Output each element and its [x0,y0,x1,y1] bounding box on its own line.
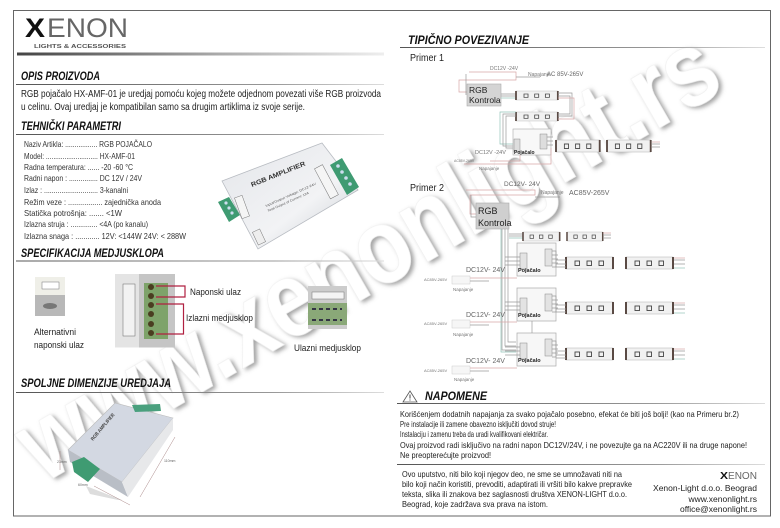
heading: Napomene: NAPOMENE [425,391,487,403]
photo: device dimensions: 23mm [57,460,67,464]
contact details: www.xenonlight.rs [687,494,757,504]
heading: Specifikacija medjusklopa: SPECIFIKACIJA MEDJUSKLOPA [21,246,164,260]
photo: device dimensions [57,403,175,505]
logo: Xenon Lights & Accessories [25,13,128,50]
product photo: RGB amplifier [218,143,359,249]
amplifier 3: Pojačalo [518,358,541,364]
product photo: RGB amplifier: Total Output of Current: 12A [267,191,310,213]
logo: Xenon Lights & Accessories: X [25,13,45,43]
wiring diagram: Primer 1: AC85V-265V [454,159,475,163]
technical parameters list: Režim veze : ................. zajednička anoda [24,198,161,207]
text block: copyright notice: Ovo uputstvo, niti bilo koji njegov deo, ne sme se umnožavati niti na [402,469,622,479]
logo: Xenon Lights & Accessories: ENON [47,13,128,43]
wiring diagram: Primer 2: Napajanje [541,190,564,196]
wiring diagram: Primer 2: DC12V- 24V [466,312,505,319]
wiring diagram: Primer 2: Napajanje [453,287,474,292]
box: RGB Kontrola: RGB [469,85,488,95]
logo: Xenon Lights & Accessories: LIGHTS & ACCESSORIES [34,44,126,50]
technical parameters list: Model: ............................ HX-AMF-01 [24,152,135,161]
amplifier 1: Pojačalo [518,268,541,274]
wiring diagram: Primer 1: Napajanje [528,72,551,78]
text block: description [21,89,381,113]
wiring diagram: Primer 1: Pojačalo [514,150,535,156]
technical parameters list: Izlazna snaga : ............ 12V: <144W 24V: < 288W [24,232,186,241]
wiring diagram: Primer 2: AC85V-265V [569,190,610,197]
text block: copyright notice [402,469,632,509]
box: RGB Kontrola: RGB [478,206,498,216]
technical parameters list: Radna temperatura: ...... -20 -60 °C [24,163,133,172]
icon: warning triangle [403,391,417,402]
photo: alternative power input [35,277,65,316]
label: Primer 2: Primer 2 [410,183,444,194]
wiring diagram: Primer 1 [454,66,660,171]
logo: small Xenon: X [720,471,728,482]
wiring diagram: Primer 2: AC85V-265V [424,368,447,373]
text block: description: RGB pojačalo HX-AMF-01 je uredjaj pomoću kojeg možete odjednom povezati više RGB proizvoda [21,89,381,100]
technical parameters list: Izlazna struja : .............. <4A (po kanalu) [24,220,148,229]
technical parameters list: Naziv Artikla: ................. RGB POJAČALO [24,139,152,149]
wiring diagram: Primer 2: AC85V-265V [424,277,447,282]
box: RGB Kontrola [476,203,512,229]
photo: device dimensions: RGB AMPLIFIER [90,412,117,442]
text block: description: u celinu. Ovaj uredjaj je kompatibilan samo sa drugim artiklima iz svoje serije. [21,102,305,113]
heading: Opis proizvoda: OPIS PROIZVODA [21,69,100,83]
text block: notes: Pre instalacije ili zamene obavezno isključiti dovod struje! [400,419,556,429]
product photo: RGB amplifier: Input/Output Voltage: DC12-24V [265,181,318,208]
text block: copyright notice: bilo koji način koristiti, prevoditi, adaptirati ili vršiti bilo kakve prepravke [402,479,632,489]
wiring diagram: Primer 2: AC85V-265V [424,321,447,326]
technical parameters list [24,139,186,241]
label: alternative power input [34,327,84,350]
amplifier 3 [505,333,558,366]
text block: notes: Instalaciju i zamenu treba da uradi kvalifikovani električar. [400,429,548,439]
photo: device dimensions: 110mm [164,459,175,463]
label: alternative power input: Alternativni [34,327,76,337]
amplifier 2: Pojačalo [518,313,541,319]
box: RGB Kontrola: Kontrola [469,95,501,105]
amplifier 2 [505,288,558,321]
wiring diagram: Primer 2: Napajanje [453,332,474,337]
wiring diagram: Primer 2: DC12V- 24V [466,358,505,365]
box: RGB Kontrola: Kontrola [478,218,512,228]
heading: Tehnički parametri: TEHNIČKI PARAMETRI [21,118,122,133]
wiring diagram: Primer 1: Napajanje [479,166,500,171]
product photo: RGB amplifier: RGB AMPLIFIER [250,161,307,189]
contact details: office@xenonlight.rs [680,504,757,514]
photo: device dimensions: 60mm [78,483,88,487]
amplifier 1 [505,243,558,276]
technical parameters list: Radni napon : ............... DC 12V / 24V [24,174,142,183]
wiring diagram: Primer 1: DC12V -24V [490,66,519,72]
photo: output connector with callouts [115,274,185,348]
wiring diagram: Primer 2 [424,181,685,382]
text block: notes: Ne preopterećujte proizvod! [400,450,491,460]
label: output connector: Izlazni medjusklop [186,313,253,323]
label: input connector: Ulazni medjusklop [294,343,361,353]
logo: small Xenon: ENON [728,471,757,482]
heading: Spoljne dimenzije uredjaja: SPOLJNE DIMENZIJE UREDJAJA [21,376,171,390]
heading: Tipično povezivanje: TIPIČNO POVEZIVANJE [408,32,530,47]
label: power input: Naponski ulaz [190,287,241,297]
header gradient bar [17,52,384,56]
wiring diagram: Primer 1: DC12V -24V [475,150,506,156]
photo: input connector [308,286,347,329]
box: RGB Kontrola [467,84,501,106]
technical parameters list: Izlaz : ............................ 3-kanalni [24,186,128,195]
contact details: Xenon-Light d.o.o. Beograd [653,483,757,493]
wiring diagram: Primer 2: Napajanje [454,377,475,382]
label: alternative power input: naponski ulaz [34,340,84,350]
wiring diagram: Primer 2: DC12V- 24V [504,181,541,188]
text block: copyright notice: teksta, slika ili znakova bez saglasnosti društva XENON-LIGHT d.o.o. [402,489,627,499]
wiring diagram: Primer 2: DC12V- 24V [466,267,505,274]
text block: copyright notice: Beograd, koje zadržava sva prava na istom. [402,499,548,509]
contact details [653,483,757,514]
technical parameters list: Statička potrošnja: ....... <1W [24,209,122,218]
text block: notes [400,409,747,460]
label: Primer 1: Primer 1 [410,53,444,64]
wiring diagram: Primer 1: AC 85V-265V [547,72,583,78]
